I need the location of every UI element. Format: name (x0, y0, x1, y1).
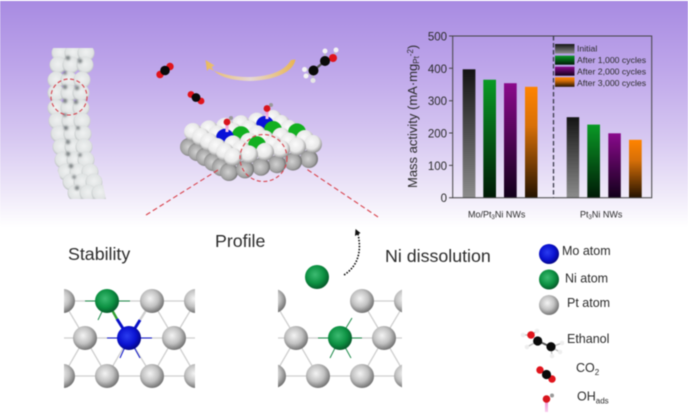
dashed zoom line left (146, 170, 218, 215)
CO2 molecule lower (188, 91, 204, 104)
adsorbed OH right (264, 103, 273, 119)
x axis group labels (468, 210, 623, 221)
bars: Mo/Pt3Ni NWs (463, 69, 538, 198)
stability atoms (63, 288, 196, 389)
CO2 molecule top (156, 63, 174, 78)
chart legend (555, 44, 647, 88)
heading: Stability: Stability (68, 244, 130, 264)
chart legend: After 3,000 cycles (577, 78, 647, 88)
floating Ni atom (305, 265, 329, 289)
catalyst slab (180, 110, 322, 181)
y axis title: Pt (412, 55, 421, 64)
nanowire illustration (48, 44, 108, 202)
legend: OHads (543, 390, 609, 412)
legend: Mo atom (539, 244, 611, 264)
heading: Ni dissolution: Ni dissolution (385, 246, 491, 266)
legend: Pt atom (539, 295, 610, 315)
dashed circle on nanowire (51, 79, 87, 115)
x axis group labels: Mo/Pt (468, 210, 492, 220)
legend: CO2: 2 (595, 368, 600, 377)
y axis tick labels (428, 32, 447, 205)
dissolution bonds (318, 318, 362, 358)
legend (521, 244, 611, 412)
axes (449, 36, 652, 198)
legend: Ethanol: Ethanol (567, 332, 609, 346)
gradient background (0, 1, 688, 227)
x axis group labels: Ni NWs (495, 210, 526, 220)
dashed circle on slab (240, 134, 287, 182)
legend: CO2 (536, 361, 600, 383)
x axis group labels: 3 (492, 215, 496, 221)
x axis group labels: Ni NWs (592, 210, 623, 220)
legend: CO2: CO (576, 361, 595, 375)
y axis tick labels: 500 (428, 32, 447, 44)
x axis group labels: 3 (589, 215, 593, 221)
legend: Mo atom: Mo atom (562, 244, 611, 258)
dotted dissolution arrow (344, 229, 360, 275)
legend: Ethanol (521, 329, 609, 358)
y axis tick labels: 200 (428, 128, 447, 140)
heading: Profile: Profile (215, 231, 266, 251)
dissolution atoms (277, 288, 403, 389)
chart legend: Initial (577, 44, 597, 54)
chart legend: After 2,000 cycles (577, 66, 647, 76)
slab top layer (184, 110, 322, 166)
legend: Pt atom: Pt atom (567, 296, 610, 310)
bars: Pt3Ni NWs (567, 117, 642, 198)
y axis title: ) (405, 45, 420, 49)
Ni dissolution lattice (277, 288, 403, 389)
ethanol molecule (302, 48, 338, 83)
stability bonds (85, 301, 152, 358)
adsorbed OH left (224, 116, 233, 132)
dashed zoom line right (305, 168, 378, 217)
legend: Ni atom: Ni atom (565, 272, 608, 286)
y axis title: -2 (406, 49, 415, 56)
y axis title: Mass activity (mA·mg (405, 64, 420, 188)
slab lower layer (180, 138, 318, 181)
y axis tick labels: 0 (441, 193, 447, 205)
bar chart (405, 32, 652, 221)
y axis tick labels: 300 (428, 96, 447, 108)
legend: OHads: OH (577, 390, 596, 404)
reaction arrow (206, 60, 296, 81)
group divider (552, 36, 554, 198)
chart legend: After 1,000 cycles (577, 55, 647, 65)
legend: Ni atom (539, 270, 608, 290)
stability lattice (63, 288, 196, 389)
y axis tick labels: 100 (428, 161, 447, 173)
legend: OHads: ads (596, 397, 609, 406)
y axis tick labels: 400 (428, 64, 447, 76)
x axis group labels: Pt (580, 210, 589, 220)
